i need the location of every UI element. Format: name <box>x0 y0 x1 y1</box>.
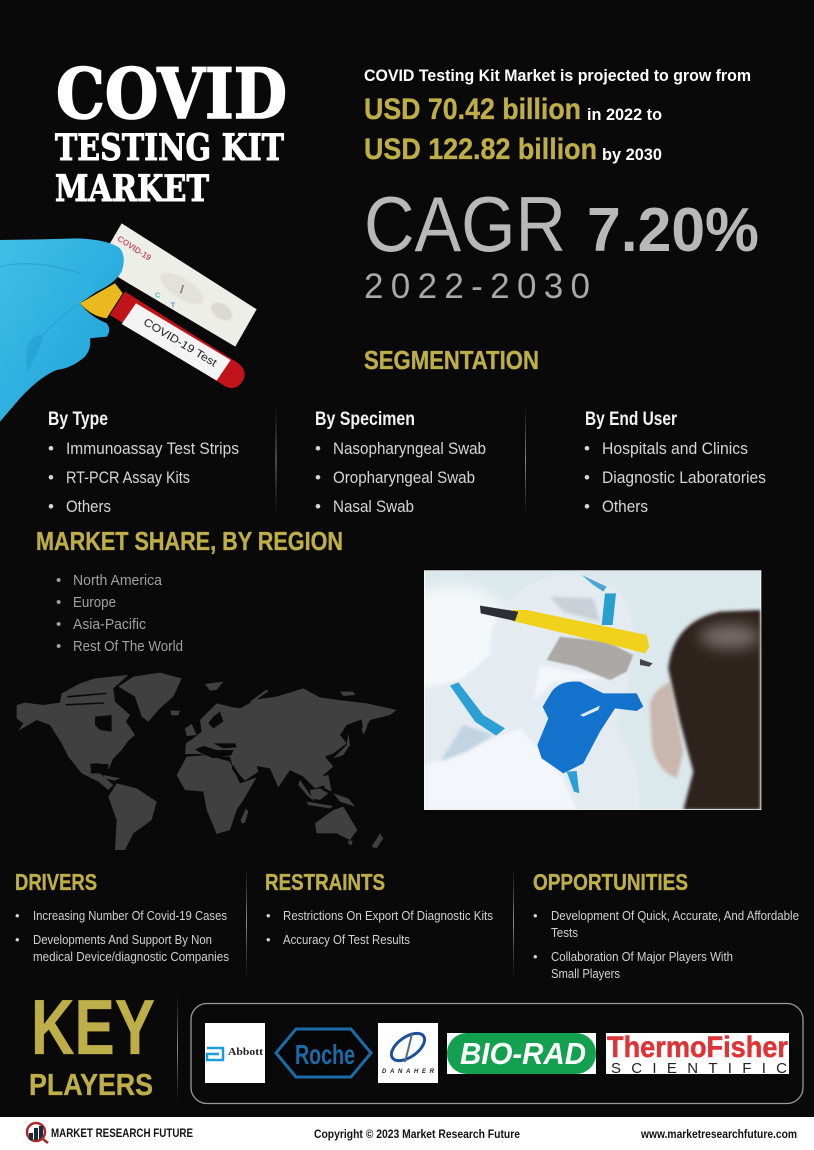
photo: eye region behind visor <box>547 637 633 680</box>
CAGR callout: 2022-2030 <box>364 267 590 306</box>
market size summary: COVID Testing Kit Market is projected to grow from <box>364 66 751 85</box>
market size summary: by 2030 <box>602 145 662 164</box>
panel: opportunities: Tests <box>551 925 578 940</box>
region list: North America <box>73 572 163 589</box>
segment: by type: By Type <box>48 409 108 430</box>
panel: restraints: RESTRAINTS <box>265 869 385 895</box>
region list: • <box>56 616 61 633</box>
segment: by specimen <box>315 409 486 516</box>
panel: drivers: medical Device/diagnostic Companies <box>33 949 229 964</box>
logo: Abbott: Abbott <box>228 1047 264 1058</box>
segment: by end user: Diagnostic Laboratories <box>602 468 766 487</box>
footer: MARKET RESEARCH FUTURE <box>51 1126 193 1140</box>
region list: Rest Of The World <box>73 638 183 655</box>
icon: test cassette: COVID-19 <box>116 233 154 263</box>
panel: drivers: Increasing Number Of Covid-19 Cases <box>33 908 227 923</box>
photo: yellow visor band <box>513 610 649 653</box>
heading: segmentation: SEGMENTATION <box>364 345 539 375</box>
panel: opportunities: Collaboration Of Major Players With <box>551 949 733 964</box>
icon: market research future logo <box>27 1123 48 1143</box>
region list: • <box>56 638 61 655</box>
region list <box>56 572 183 655</box>
CAGR callout: CAGR <box>364 180 566 268</box>
panel: restraints <box>265 869 493 947</box>
segment: by type: • <box>48 439 54 458</box>
segment: by end user <box>584 409 766 516</box>
panel: opportunities: Small Players <box>551 966 620 981</box>
region list: Europe <box>73 594 116 611</box>
photo: blue gloved hand <box>537 681 643 773</box>
market size summary: USD 122.82 billion <box>364 133 597 166</box>
panel: opportunities: • <box>533 949 538 964</box>
photo: blue tape <box>450 682 505 736</box>
market size summary <box>364 66 751 166</box>
logo: Roche: Roche <box>295 1039 355 1070</box>
photo: protective suit <box>425 573 642 810</box>
panel: restraints: Restrictions On Export Of Diagnostic Kits <box>283 908 493 923</box>
icon: blood sample tube <box>80 283 245 388</box>
footer <box>0 1117 814 1150</box>
heading: market share by region: MARKET SHARE, BY REGION <box>36 526 343 556</box>
icon: blood sample tube: COVID-19 Test <box>141 316 219 369</box>
illustration: gloved hand with test kit <box>0 223 257 422</box>
segment: by type: • <box>48 468 54 487</box>
logo: Bio-Rad: BIO-RAD <box>460 1036 586 1071</box>
CAGR callout <box>364 180 759 306</box>
segment: by end user: Hospitals and Clinics <box>602 439 748 458</box>
panel: drivers: • <box>15 932 20 947</box>
panel: player logos <box>191 1004 803 1104</box>
title <box>55 54 287 210</box>
panel: drivers: Developments And Support By Non <box>33 932 212 947</box>
region list: Asia-Pacific <box>73 616 146 633</box>
panel: opportunities: • <box>533 908 538 923</box>
segment: by end user: • <box>584 497 590 516</box>
segment: by specimen: Nasopharyngeal Swab <box>333 439 486 458</box>
segment: by specimen: • <box>315 497 321 516</box>
segment: by end user: By End User <box>585 409 677 430</box>
panel: drivers <box>15 869 229 964</box>
world map <box>17 673 397 850</box>
icon: test cassette: T <box>171 300 176 309</box>
logo: Danaher <box>378 1023 438 1083</box>
segment: by end user: Others <box>602 497 648 516</box>
logo: Roche <box>276 1029 371 1077</box>
panel: opportunities: OPPORTUNITIES <box>533 869 688 895</box>
segment: by specimen: • <box>315 468 321 487</box>
heading: key players: PLAYERS <box>29 1067 153 1102</box>
logo: Danaher: DANAHER <box>382 1069 435 1075</box>
heading: key players: KEY <box>31 983 155 1071</box>
segment: by specimen: Nasal Swab <box>333 497 414 516</box>
segment: by specimen: • <box>315 439 321 458</box>
title: MARKET <box>55 168 209 210</box>
heading: key players <box>29 983 155 1102</box>
segment: by type: RT-PCR Assay Kits <box>66 468 190 487</box>
icon: test cassette: C <box>155 290 161 299</box>
segment: by type: Others <box>66 497 111 516</box>
footer: Copyright © 2023 Market Research Future <box>314 1127 520 1141</box>
panel: opportunities <box>533 869 799 981</box>
segment: by type: • <box>48 497 54 516</box>
market size summary: USD 70.42 billion <box>364 93 581 126</box>
panel: drivers: • <box>15 908 20 923</box>
title: TESTING KIT <box>55 127 284 169</box>
segment: by specimen: Oropharyngeal Swab <box>333 468 475 487</box>
logo: Thermo Fisher Scientific <box>606 1031 789 1077</box>
title: COVID <box>56 54 287 135</box>
photo: health worker in protective suit <box>390 570 761 810</box>
icon: blue glove <box>0 238 124 422</box>
market size summary: in 2022 to <box>587 105 662 124</box>
photo: background light <box>425 582 504 689</box>
segment: by end user: • <box>584 439 590 458</box>
logo: Abbott <box>205 1023 265 1083</box>
panel: restraints: • <box>266 932 271 947</box>
logo: Thermo Fisher Scientific: ThermoFisher <box>607 1031 788 1064</box>
panel: restraints: • <box>266 908 271 923</box>
segment: by specimen: By Specimen <box>315 409 415 430</box>
segment: by end user: • <box>584 468 590 487</box>
CAGR callout: 7.20% <box>587 196 759 265</box>
region list: • <box>56 572 61 589</box>
panel: restraints: Accuracy Of Test Results <box>283 932 410 947</box>
logo: Thermo Fisher Scientific: SCIENTIFIC <box>611 1060 787 1077</box>
photo: patient head and hair <box>650 682 683 778</box>
region list: • <box>56 594 61 611</box>
icon: test cassette <box>110 223 257 347</box>
panel: drivers: DRIVERS <box>15 869 97 895</box>
segment: by type: Immunoassay Test Strips <box>66 439 239 458</box>
segment: by type <box>48 409 239 516</box>
